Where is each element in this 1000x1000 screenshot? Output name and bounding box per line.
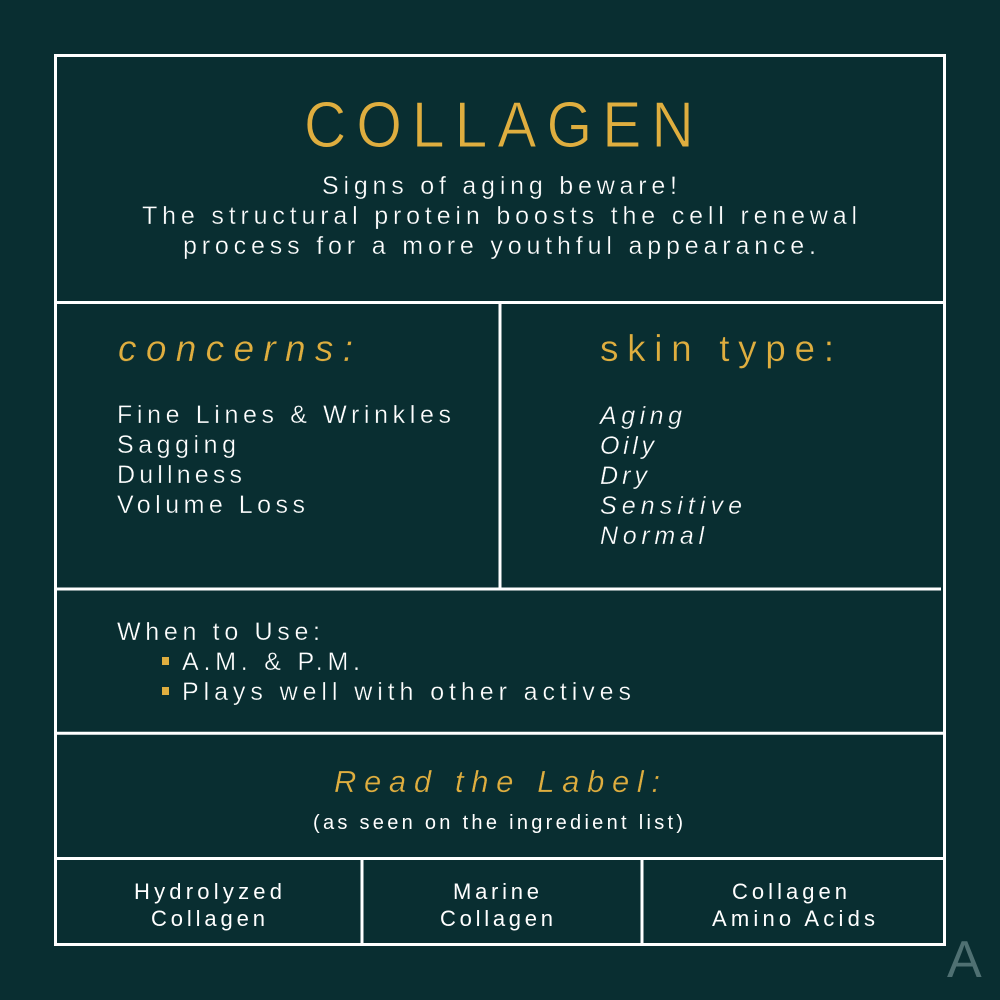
panel: marine collagen [440, 879, 553, 931]
label subheading: (as seen on the ingredient list) [313, 812, 683, 834]
concerns heading: concerns: [118, 328, 353, 369]
panel: hydrolyzed collagen [134, 879, 282, 931]
title: COLLAGEN [304, 89, 694, 162]
intro text: Signs of aging beware! [322, 172, 677, 200]
intro text [142, 172, 857, 260]
panel: hydrolyzed collagen: Collagen [151, 906, 265, 931]
panel: hydrolyzed collagen: Hydrolyzed [134, 879, 282, 904]
panel: when to use [117, 618, 631, 706]
panel: collagen amino acids: Collagen [732, 879, 847, 904]
panel: skin type [598, 328, 834, 550]
grid frame [55, 56, 945, 945]
skin type list: Oily [600, 432, 656, 460]
usage item: A.M. and P.M.: A.M. & P.M. [182, 648, 360, 676]
concerns list [117, 401, 451, 519]
intro text: process for a more youthful appearance. [183, 232, 816, 260]
panel: marine collagen: Collagen [440, 906, 553, 931]
panel: concerns [117, 328, 451, 519]
logo watermark: A [947, 931, 982, 989]
skin type list: Normal [600, 522, 705, 550]
concerns list: Volume Loss [117, 491, 305, 519]
panel: header [142, 89, 857, 260]
concerns list: Dullness [117, 461, 242, 489]
concerns list: Sagging [117, 431, 236, 459]
panel: read the label [313, 764, 683, 834]
panel: marine collagen: Marine [453, 879, 539, 904]
skin type list [598, 402, 742, 550]
panel: collagen amino acids: Amino Acids [712, 906, 875, 931]
intro text: The structural protein boosts the cell renewal [142, 202, 857, 230]
icon: bullet [162, 687, 169, 695]
skin type list: Aging [598, 402, 682, 430]
skin type list: Sensitive [600, 492, 742, 520]
icon: bullet [162, 657, 169, 665]
panel: collagen amino acids [712, 879, 875, 931]
label heading: Read the Label: [334, 764, 660, 799]
concerns list: Fine Lines & Wrinkles [117, 401, 451, 429]
when to use heading: When to Use: [117, 618, 320, 646]
skin type heading: skin type: [600, 328, 834, 369]
skin type list: Dry [600, 462, 648, 490]
usage item: plays well: Plays well with other actives [182, 678, 631, 706]
